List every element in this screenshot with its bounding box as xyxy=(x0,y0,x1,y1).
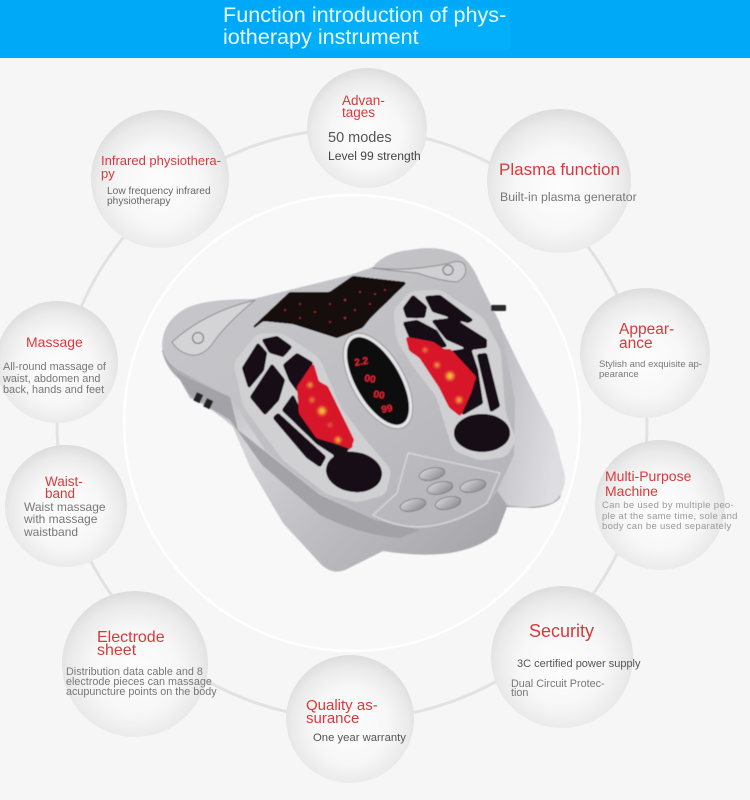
bubble: Massage: All-round massage of xyxy=(3,361,107,373)
bubble: Electrode sheet: sheet xyxy=(97,642,137,659)
bubble: Security xyxy=(491,586,641,728)
connecting ring xyxy=(57,129,647,719)
display panel: 2.2 xyxy=(354,356,370,369)
bubble: Security: 3C certified power supply xyxy=(517,658,641,670)
bubble: Massage: Massage xyxy=(26,334,83,350)
title: iotherapy instrument xyxy=(223,24,419,49)
display panel xyxy=(329,322,427,440)
bubble: Advantages: Level 99 strength xyxy=(328,149,421,163)
left foot zone xyxy=(233,333,392,503)
bubble: Electrode sheet: Electrode xyxy=(97,629,165,646)
bubble: Advantages: 50 modes xyxy=(328,130,392,146)
bubble: Multi-Purpose Machine: Multi-Purpose xyxy=(605,468,692,484)
bubble: Security: tion xyxy=(511,687,528,699)
bubble: Massage: waist, abdomen and xyxy=(2,373,100,385)
bubble: Waistband: with massage xyxy=(23,512,98,526)
bubble: Multi-Purpose Machine: body can be used separately xyxy=(602,521,732,532)
bubble: Plasma function: Plasma function xyxy=(499,160,620,179)
bubble: Advantages xyxy=(307,68,427,188)
bubble: Infrared physiotherapy: Low frequency infrared xyxy=(107,186,211,197)
bubble: Electrode sheet: electrode pieces can massage xyxy=(66,676,212,688)
device lower skirt xyxy=(162,340,565,572)
bubble: Waistband: Waist- xyxy=(45,474,83,489)
display panel: 00 xyxy=(372,389,386,402)
device: foot massager xyxy=(162,248,565,572)
icon: power button left xyxy=(192,332,204,344)
display panel: 00 xyxy=(363,373,377,386)
bubble: Waistband: Waist massage xyxy=(24,500,106,514)
bubble: Waistband xyxy=(5,445,127,567)
device right wing button xyxy=(372,262,466,282)
bubble: Appearance: Appear- xyxy=(619,321,674,338)
bubble: Quality assurance: One year warranty xyxy=(313,732,406,744)
bubble: Waistband: waistband xyxy=(23,525,78,539)
bubble: Appearance xyxy=(580,288,710,418)
control buttons xyxy=(373,453,500,527)
bubble: Plasma function: Built-in plasma generator xyxy=(500,190,637,204)
device right wing highlight xyxy=(490,325,565,507)
right foot zone xyxy=(393,289,517,461)
header banner xyxy=(0,0,750,58)
bubble: Multi-Purpose Machine xyxy=(595,440,738,570)
bubble: Advantages: tages xyxy=(342,105,375,120)
bubble: Advantages: Advan- xyxy=(342,93,385,108)
side knob xyxy=(491,305,506,311)
ports xyxy=(193,392,213,409)
icon: power button right xyxy=(443,265,453,275)
bubble: Multi-Purpose Machine: Machine xyxy=(605,483,658,499)
bubble: Security: Security xyxy=(529,621,594,641)
bubble: Quality assurance: surance xyxy=(306,710,359,727)
bubble: Massage xyxy=(0,301,118,423)
device top plate xyxy=(162,248,515,528)
display panel: 99 xyxy=(381,403,394,416)
bubble: Quality assurance: Quality as- xyxy=(306,697,378,714)
right red light xyxy=(407,338,475,415)
bubble: Electrode sheet: Distribution data cable and 8 xyxy=(66,666,203,678)
bubble: Appearance: pearance xyxy=(599,369,639,380)
bubble: Massage: back, hands and feet xyxy=(3,384,104,396)
device side band xyxy=(175,372,420,538)
bubble: Infrared physiotherapy: Infrared physiothera- xyxy=(101,153,221,168)
left red light xyxy=(298,365,353,448)
bubble: Appearance: Stylish and exquisite ap- xyxy=(599,359,702,370)
bubble: Multi-Purpose Machine: ple at the same time, sole and xyxy=(602,511,738,522)
bubble: Plasma function xyxy=(487,109,637,253)
bubble: Multi-Purpose Machine: Can be used by multiple peo- xyxy=(602,500,734,511)
device left wing button xyxy=(172,300,255,355)
bubble: Infrared physiotherapy: py xyxy=(101,166,115,181)
bubble: Electrode sheet xyxy=(62,591,217,737)
bubble: Infrared physiotherapy xyxy=(91,110,229,248)
inner white ring xyxy=(124,195,580,651)
title: Function introduction of phys- xyxy=(223,2,506,27)
bubble: Quality assurance xyxy=(286,655,414,783)
bubble: Infrared physiotherapy: physiotherapy xyxy=(107,196,171,207)
bubble: Appearance: ance xyxy=(619,335,653,352)
bubble: Security: Dual Circuit Protec- xyxy=(511,678,605,690)
bubble: Electrode sheet: acupuncture points on the body xyxy=(66,686,217,698)
bubble: Waistband: band xyxy=(45,486,75,501)
butterfly pad xyxy=(254,277,405,337)
